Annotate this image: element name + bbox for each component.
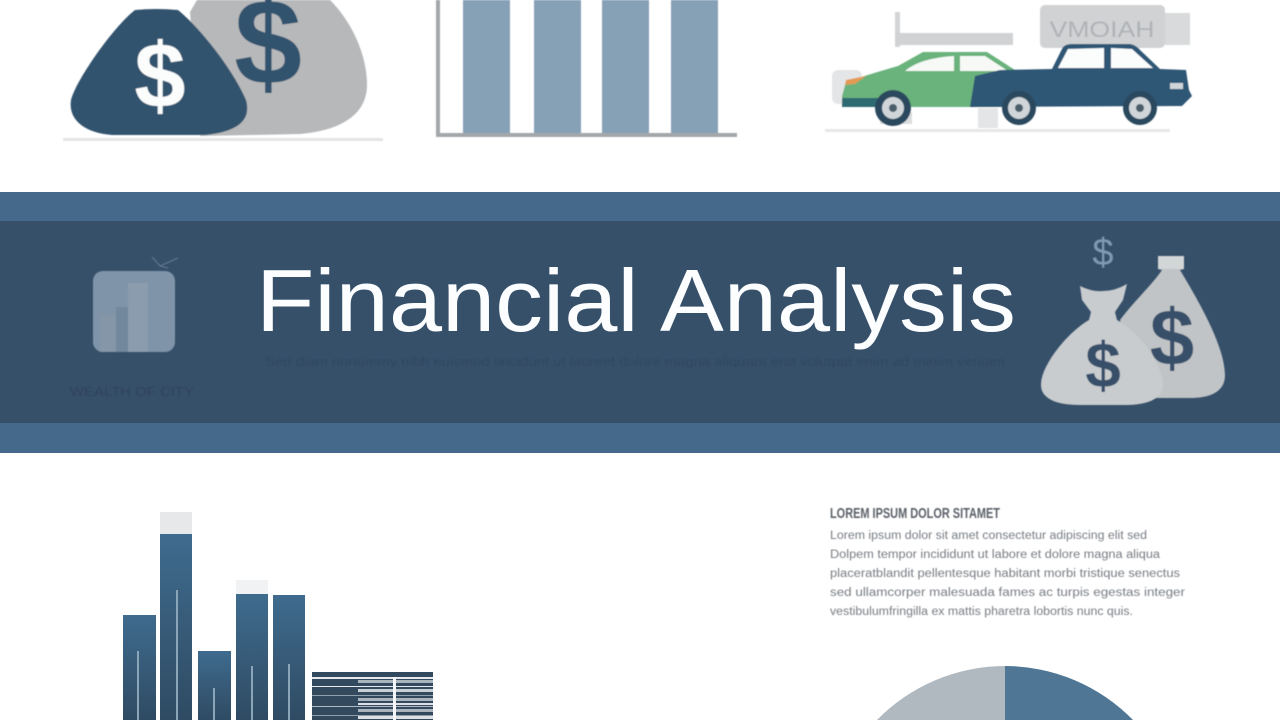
icon: banner money bags [1041,232,1225,405]
text block body: sed ullamcorper malesuada fames ac turpis egestas integer [830,587,1185,599]
text block body: Lorem ipsum dolor sit amet consectetur adipiscing elit sed [830,530,1147,542]
icon: cars with signs [825,5,1192,132]
icon: banner money bags: $ [1092,232,1114,274]
icon: cars with signs: VMOIAH [1050,17,1154,42]
text block heading: LOREM IPSUM DOLOR SITAMET [830,505,1000,522]
text block body: Dolpem tempor incididunt ut labore et dolore magna aliqua [830,549,1161,561]
blue car [970,44,1192,107]
pie chart [877,666,1133,720]
caption under building tile: WEALTH OF CITY [70,384,194,399]
icon: building tile [93,257,178,352]
text block body [830,530,1185,618]
icon: banner money bags: $ [1085,329,1121,401]
data table [312,672,433,720]
icon: banner money bags: $ [1150,293,1194,382]
text block body: vestibulumfringilla ex mattis pharetra lobortis nunc quis. [830,606,1133,618]
green car [842,52,1015,107]
title: Financial Analysis [256,251,1016,350]
text block body: placeratblandit pellentesque habitant morbi tristique senectus [830,568,1180,580]
bar chart: top centre [436,0,737,137]
icon: money bags [63,0,383,141]
bar chart: bottom left [123,512,305,720]
panel: title banner [0,192,1280,453]
subtitle: Sed diam nonummy nibh euismod tincidunt ut laoreet dolore magna aliquam erat volutpat enim ad minim veniam [265,354,1005,369]
wheels [875,90,1157,126]
icon: money bags: $ [134,25,186,127]
text block: lorem [830,505,1185,618]
